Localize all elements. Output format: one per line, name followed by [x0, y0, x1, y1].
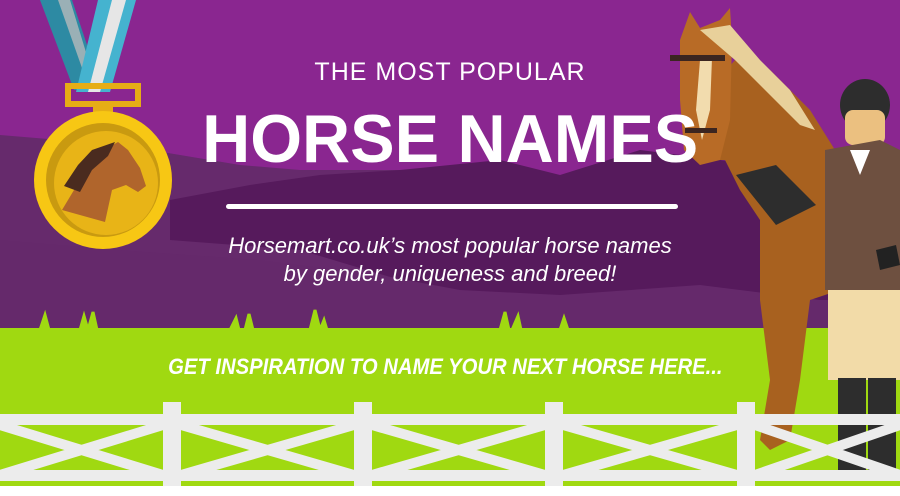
subtitle: by gender, uniqueness and breed!: [284, 261, 616, 286]
call to action: GET INSPIRATION TO NAME YOUR NEXT HORSE HERE...: [168, 354, 722, 379]
subtitle: [228, 233, 672, 286]
subtitle: Horsemart.co.uk’s most popular horse names: [228, 233, 672, 258]
title: horse names: HORSE NAMES: [202, 101, 698, 177]
title: the most popular: THE MOST POPULAR: [314, 58, 586, 86]
icon: medal: [34, 0, 172, 249]
divider line: [226, 204, 678, 209]
